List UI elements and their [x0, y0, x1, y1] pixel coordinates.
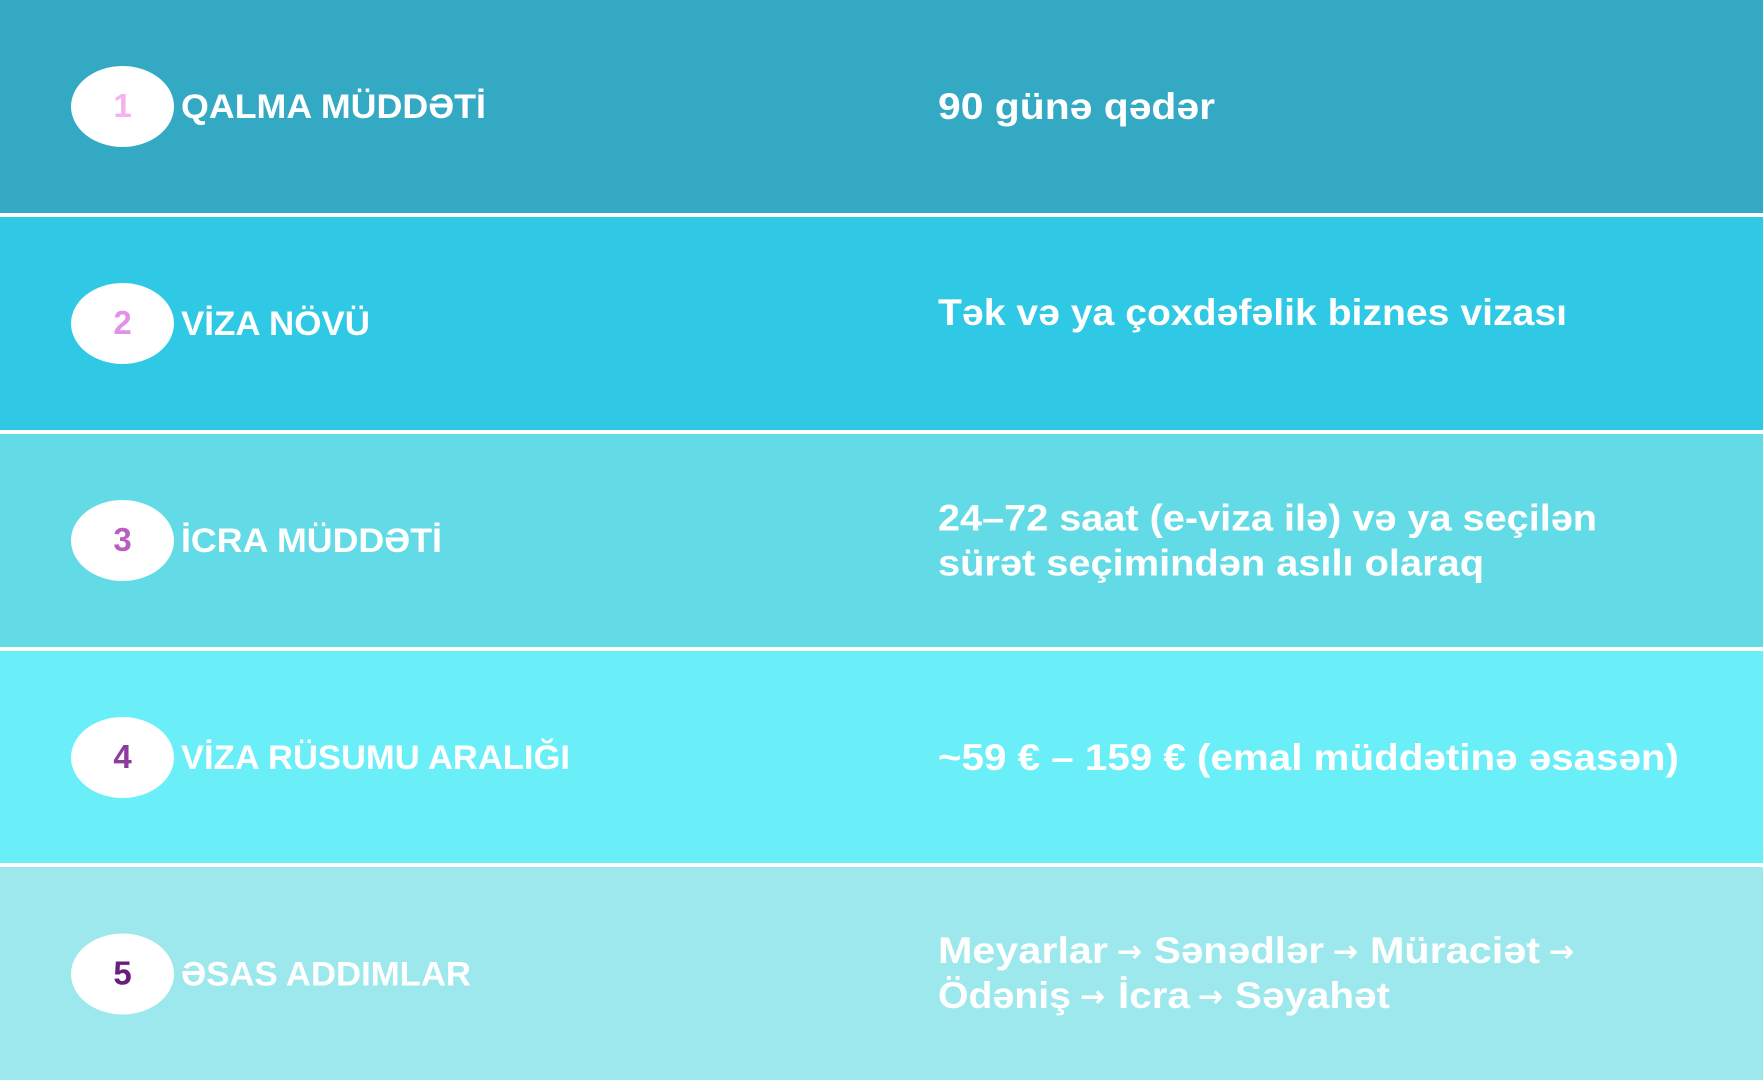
value: main steps: Müraciət	[1370, 930, 1540, 971]
value: main steps: Səyahət	[1235, 975, 1390, 1016]
value: main steps: Ödəniş	[938, 975, 1071, 1016]
badge: number 1: 1	[113, 87, 132, 124]
badge: number 4: 4	[113, 738, 132, 775]
panel: row 5 main steps	[0, 867, 1763, 1080]
value: main steps: →	[1117, 934, 1142, 970]
value: main steps: →	[1549, 934, 1574, 970]
badge: number 2: 2	[113, 304, 132, 341]
value: main steps: →	[1198, 980, 1223, 1014]
panel: row 2 visa type	[0, 217, 1763, 430]
badge: number 3: 3	[113, 521, 132, 558]
badge: number 3	[71, 500, 174, 581]
value: processing time: sürət seçimindən asılı olaraq	[938, 542, 1484, 584]
label: stay duration: QALMA MÜDDƏTİ	[181, 88, 486, 126]
panel: row 3 processing time	[0, 434, 1763, 647]
panel: row 4 visa fee range	[0, 651, 1763, 863]
value: visa type: Tək və ya çoxdəfəlik biznes vizası	[938, 292, 1567, 333]
value: main steps: →	[1333, 934, 1358, 970]
value: main steps: Sənədlər	[1154, 930, 1324, 971]
panel: row 1 stay duration	[0, 0, 1763, 213]
value: stay duration: 90 günə qədər	[938, 86, 1215, 127]
badge: number 2	[71, 283, 174, 364]
value: main steps: →	[1080, 980, 1105, 1014]
value: main steps: Meyarlar	[938, 930, 1108, 971]
badge: number 5	[71, 934, 174, 1014]
badge: number 5: 5	[113, 954, 132, 992]
label: visa type: VİZA NÖVÜ	[181, 305, 370, 343]
badge: number 1	[71, 66, 174, 147]
label: main steps: ƏSAS ADDIMLAR	[181, 956, 471, 994]
value: main steps: İcra	[1118, 975, 1190, 1016]
badge: number 4	[71, 717, 174, 798]
value: processing time: 24–72 saat (e-viza ilə) və ya seçilən	[938, 498, 1597, 538]
value: visa fee range: ~59 € – 159 € (emal müddətinə əsasən)	[938, 737, 1679, 778]
label: processing time: İCRA MÜDDƏTİ	[181, 522, 442, 560]
value: main steps	[938, 930, 1574, 1016]
label: visa fee range: VİZA RÜSUMU ARALIĞI	[181, 739, 570, 777]
value: processing time	[938, 498, 1597, 584]
